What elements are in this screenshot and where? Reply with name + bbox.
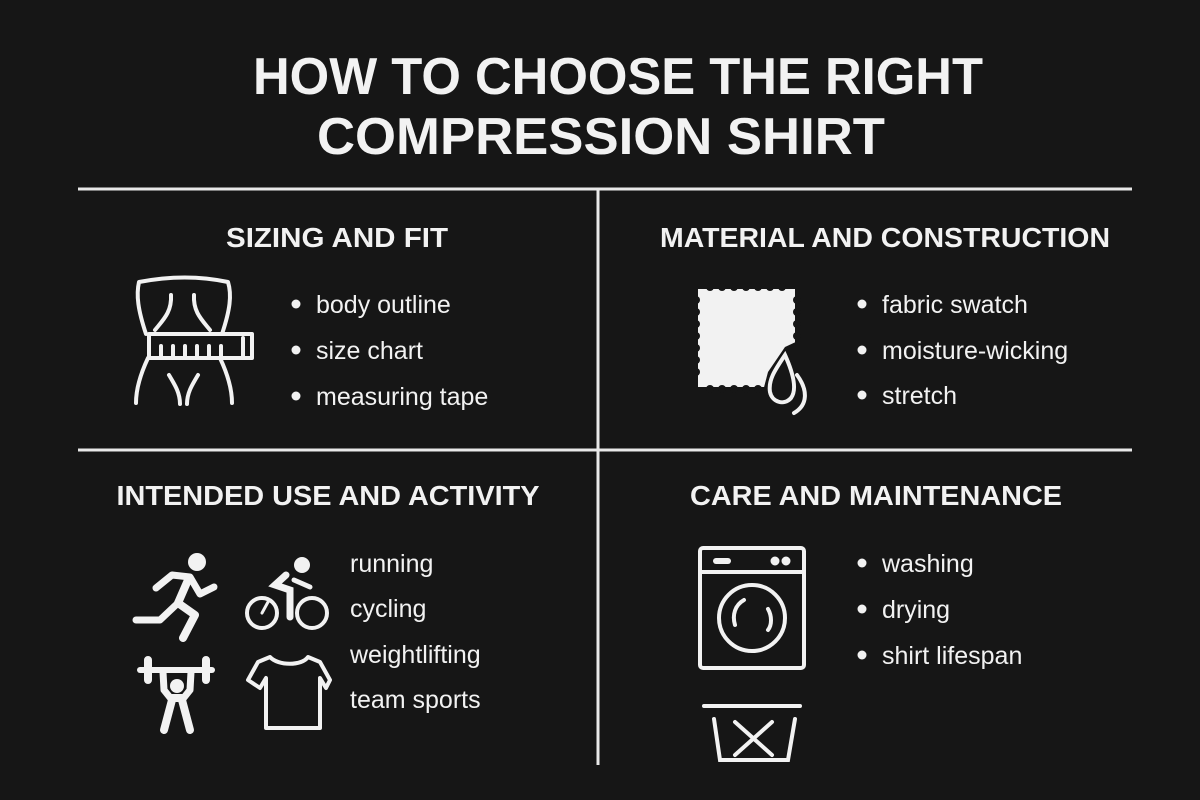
icon: t-shirt bbox=[248, 657, 330, 728]
icon: do not wash bbox=[704, 706, 800, 760]
bullet list: measuring tape bbox=[316, 383, 488, 411]
panel: care and maintenance: washing bbox=[881, 550, 974, 578]
panel: care and maintenance: drying bbox=[882, 596, 950, 624]
icon: fabric swatch bbox=[692, 283, 801, 395]
icon: washing machine bbox=[700, 548, 804, 668]
panel: intended use and activity: cycling bbox=[350, 595, 426, 623]
title bbox=[253, 48, 983, 166]
icon: body with measuring tape bbox=[136, 278, 252, 404]
heading: material and construction: MATERIAL AND CONSTRUCTION bbox=[660, 222, 1110, 253]
panel: material and construction: fabric swatch bbox=[882, 291, 1028, 319]
panel: intended use and activity: team sports bbox=[350, 686, 481, 714]
panel: material and construction: moisture-wicking bbox=[882, 337, 1068, 365]
icon: water drop bbox=[770, 355, 805, 413]
heading: sizing and fit: SIZING AND FIT bbox=[226, 222, 448, 253]
panel: intended use and activity bbox=[116, 480, 540, 730]
panel: care and maintenance: shirt lifespan bbox=[882, 642, 1022, 670]
panel: intended use and activity: weightlifting bbox=[349, 641, 481, 669]
icon: runner bbox=[136, 553, 214, 638]
icon: weightlifter bbox=[140, 660, 212, 730]
title: HOW TO CHOOSE THE RIGHT bbox=[253, 48, 983, 106]
heading: intended use: INTENDED USE AND ACTIVITY bbox=[116, 480, 540, 511]
icon: cyclist bbox=[247, 557, 327, 628]
heading: care and maintenance: CARE AND MAINTENANCE bbox=[690, 480, 1062, 511]
panel: care and maintenance bbox=[690, 480, 1062, 760]
panel: intended use and activity: running bbox=[350, 550, 433, 578]
panel: sizing and fit bbox=[136, 222, 488, 411]
bullet list: body outline bbox=[316, 291, 451, 319]
bullet list: size chart bbox=[316, 337, 423, 365]
bullet list bbox=[292, 291, 488, 411]
panel: material and construction bbox=[660, 222, 1110, 413]
panel: material and construction: stretch bbox=[882, 382, 957, 410]
title: COMPRESSION SHIRT bbox=[317, 108, 885, 166]
